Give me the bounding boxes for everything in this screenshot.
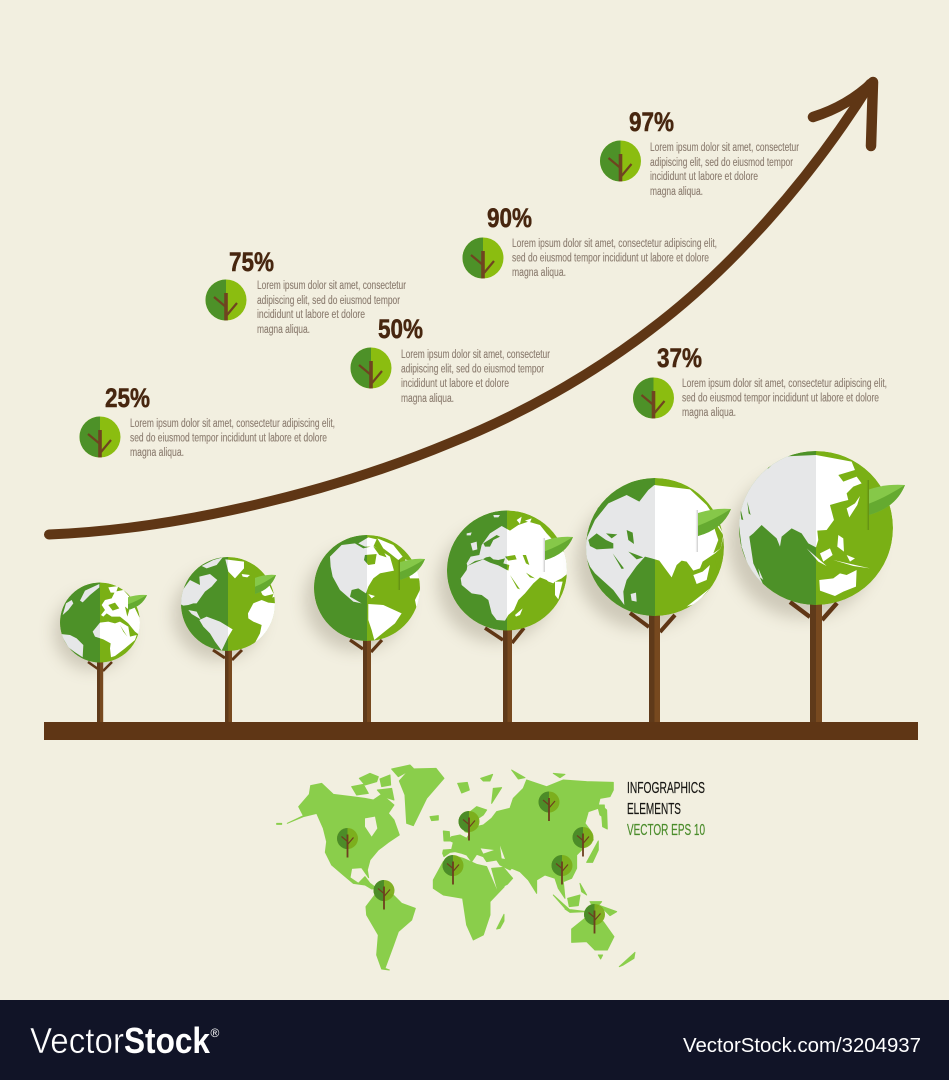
globe tree 3 [305, 535, 425, 723]
description: Lorem ipsum dolor sit amet, consectetur [257, 280, 406, 292]
footer logo: Vector [30, 1020, 124, 1061]
percentage: 50% [378, 314, 423, 344]
map caption: INFOGRAPHICS [627, 780, 705, 797]
description: Lorem ipsum dolor sit amet, consectetur adipiscing elit, [512, 238, 717, 250]
icon: tree [600, 140, 641, 182]
description: magna aliqua. [650, 186, 703, 198]
icon: tree [80, 416, 120, 458]
world map [277, 765, 635, 970]
globe tree 1 [54, 582, 147, 723]
map caption: VECTOR EPS 10 [627, 822, 705, 839]
percentage: 37% [657, 343, 702, 373]
item: 50% [350, 314, 550, 405]
description: incididunt ut labore et dolore [401, 378, 509, 390]
description: sed do eiusmod tempor incididunt ut labore et dolore [512, 252, 709, 264]
percentage: 75% [229, 247, 274, 277]
ground bar [44, 722, 918, 740]
description: adipiscing elit, sed do eiusmod tempor [257, 295, 400, 307]
globe tree 6 [729, 451, 905, 723]
description: magna aliqua. [682, 407, 736, 419]
description: magna aliqua. [512, 267, 566, 279]
item: 25% [80, 383, 335, 459]
description: adipiscing elit, sed do eiusmod tempor [401, 364, 544, 376]
item: 37% [633, 343, 887, 419]
footer logo: Stock [124, 1020, 211, 1061]
description [682, 378, 887, 419]
footer url: VectorStock.com/3204937 [683, 1034, 921, 1057]
description: Lorem ipsum dolor sit amet, consectetur [650, 142, 799, 154]
item: 90% [462, 203, 717, 279]
percentage: 90% [487, 203, 532, 233]
map caption: ELEMENTS [627, 801, 681, 818]
footer bar [0, 1000, 949, 1080]
item: 75% [206, 247, 406, 336]
description: magna aliqua. [401, 393, 454, 405]
icon: tree [206, 280, 246, 320]
icon: tree [633, 378, 674, 418]
description: Lorem ipsum dolor sit amet, consectetur adipiscing elit, [130, 418, 335, 430]
description: sed do eiusmod tempor incididunt ut labore et dolore [682, 392, 879, 404]
description [512, 238, 717, 279]
item: 97% [600, 107, 799, 198]
icon: tree [462, 238, 504, 278]
icon: tree [350, 348, 392, 388]
percentage: 25% [105, 383, 150, 413]
description: adipiscing elit, sed do eiusmod tempor [650, 157, 793, 169]
description: sed do eiusmod tempor incididunt ut labore et dolore [130, 432, 327, 444]
description: incididunt ut labore et dolore [650, 171, 758, 183]
map tree markers [337, 792, 605, 934]
growth arrow [49, 82, 873, 534]
description [401, 349, 550, 405]
description [257, 280, 406, 336]
description [650, 142, 799, 198]
description: incididunt ut labore et dolore [257, 309, 365, 321]
percentage: 97% [629, 107, 674, 137]
globe tree 4 [438, 510, 573, 723]
map caption [627, 780, 705, 839]
description: magna aliqua. [130, 447, 184, 459]
globe tree 2 [173, 557, 276, 723]
description: Lorem ipsum dolor sit amet, consectetur [401, 349, 550, 361]
description: magna aliqua. [257, 324, 310, 336]
description [130, 418, 335, 459]
registered mark: ® [210, 1026, 220, 1040]
globe tree 5 [576, 478, 731, 723]
